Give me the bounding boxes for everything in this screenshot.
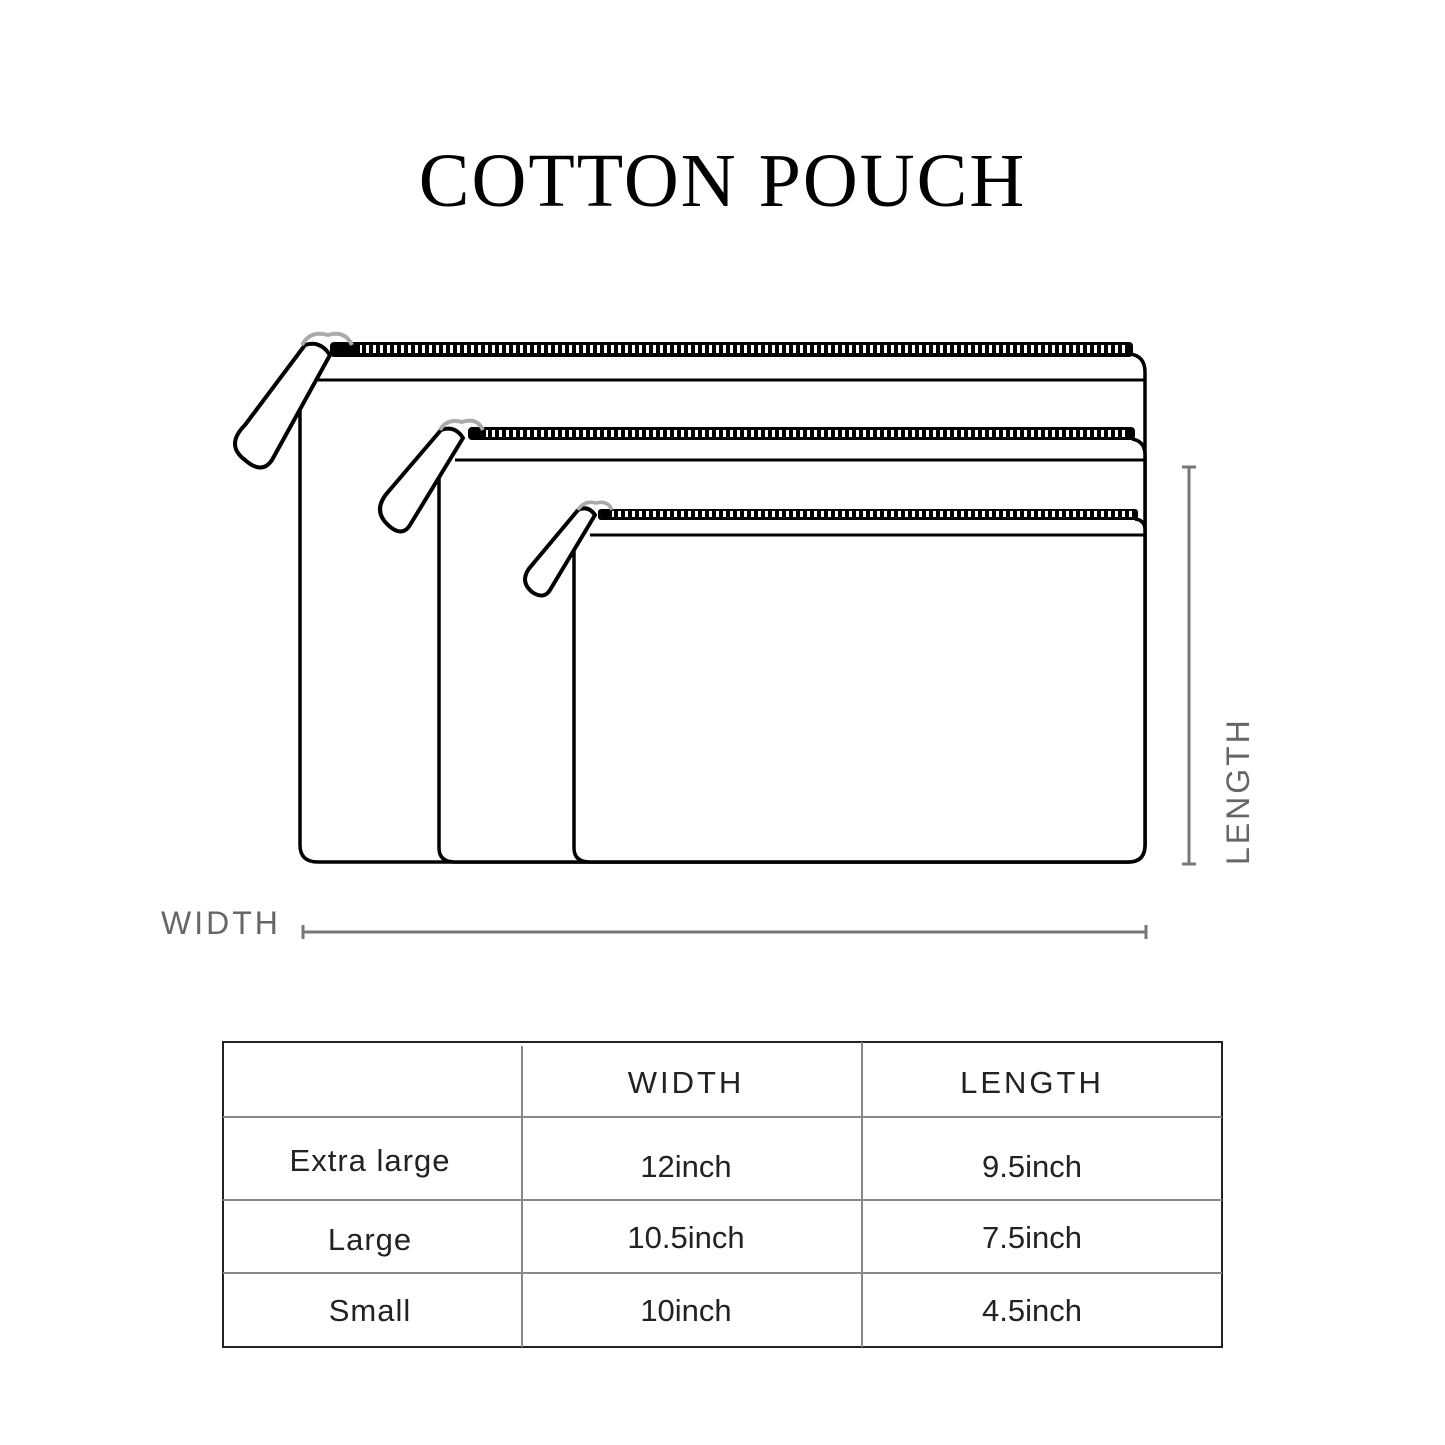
- size table: Large: [328, 1222, 412, 1257]
- size table: 10inch: [640, 1293, 732, 1328]
- length arrow: [1182, 467, 1196, 865]
- pouch: small: [525, 502, 1145, 862]
- size table: 10.5inch: [627, 1220, 745, 1255]
- size table: WIDTH: [628, 1065, 744, 1100]
- size table: 4.5inch: [982, 1293, 1082, 1328]
- size table: LENGTH: [960, 1065, 1104, 1100]
- pouch: extra large: [235, 334, 1145, 862]
- width arrow: [303, 925, 1146, 939]
- length label: LENGTH: [1220, 717, 1256, 865]
- pouch: large: [380, 421, 1145, 862]
- size table: Small: [329, 1293, 411, 1328]
- size table: Extra large: [290, 1143, 450, 1178]
- width label: WIDTH: [161, 905, 281, 941]
- size table: [223, 1042, 1222, 1347]
- zipper puller: [235, 334, 352, 468]
- size table: 12inch: [640, 1149, 732, 1184]
- title: COTTON POUCH: [419, 139, 1026, 223]
- size table: 7.5inch: [982, 1220, 1082, 1255]
- size table: 9.5inch: [982, 1149, 1082, 1184]
- zipper puller: [525, 502, 612, 596]
- zipper puller: [380, 421, 483, 532]
